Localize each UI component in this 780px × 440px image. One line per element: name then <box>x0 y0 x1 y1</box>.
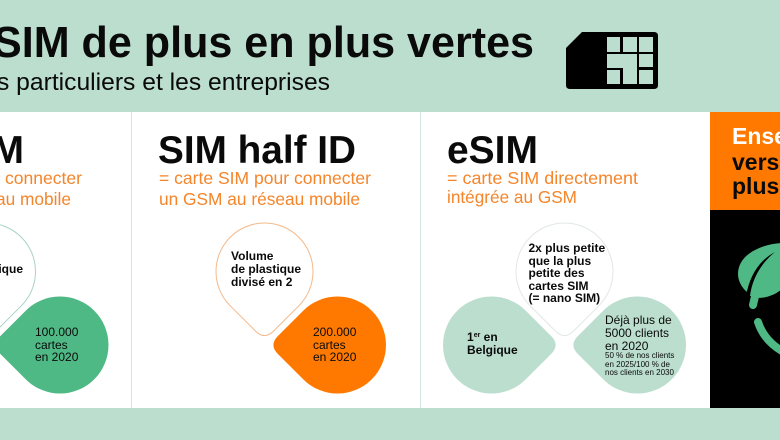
drop: clients <box>573 296 686 394</box>
heading: eSIM: eSIM <box>447 129 538 172</box>
drop: 200.000 cartes: en 2020 <box>313 350 357 364</box>
drop: plastic divided by 2: divisé en 2 <box>231 275 293 289</box>
drop: clients: Déjà plus de <box>605 313 672 327</box>
drop: plastic divided by 2 <box>216 223 313 336</box>
drop: clients: 5000 clients <box>605 326 669 340</box>
drop: plastic divided by 2: de plastique <box>231 262 301 276</box>
white panel <box>0 112 710 408</box>
description: eSIM: = carte SIM directement <box>447 168 638 188</box>
drop: 200.000 cartes: 200.000 <box>313 325 357 339</box>
icon: leaf <box>738 243 780 351</box>
drop: first in Belgium: er <box>474 332 481 339</box>
description: SIM half ID <box>159 168 371 209</box>
drop: 100.000 cartes: 100.000 <box>35 325 79 339</box>
description: eSIM <box>447 168 638 207</box>
drop: first in Belgium: en <box>480 330 498 344</box>
drop: size: (= nano SIM) <box>528 291 600 305</box>
panel: orange header <box>710 112 780 210</box>
drop: clients: en 2020 <box>605 339 649 353</box>
description: SIM half ID: = carte SIM pour connecter <box>159 168 371 188</box>
drop: size <box>516 223 613 336</box>
description: eSIM: intégrée au GSM <box>447 187 577 207</box>
panel: black <box>710 210 780 408</box>
drop: 200.000 cartes: cartes <box>313 338 346 352</box>
drop: size: 2x plus petite <box>528 241 606 255</box>
drop: first in Belgium: Belgique <box>467 343 518 357</box>
drop: size: petite des <box>528 266 585 280</box>
panel: SIM half ID <box>158 129 386 394</box>
drop: clients: nos clients en 2030 <box>605 368 674 377</box>
drop: 200.000 cartes <box>273 296 386 394</box>
panel: eSIM <box>443 129 686 394</box>
drop: 100.000 cartes: cartes <box>35 338 68 352</box>
subtitle: s particuliers et les entreprises <box>0 69 330 96</box>
drop: first in Belgium: 1 <box>467 330 474 344</box>
drop: plastic divided by 2: Volume <box>231 249 274 263</box>
drop: plastic <box>0 223 36 336</box>
description: SIM half ID: un GSM au réseau mobile <box>159 189 360 209</box>
drop: clients: en 2025/100 % de <box>605 360 670 369</box>
heading: SIM half ID: SIM half ID <box>158 129 356 172</box>
drop: size: cartes SIM <box>528 279 589 293</box>
drop: 100.000 cartes: en 2020 <box>35 350 79 364</box>
drop: clients: 50 % de nos clients <box>605 351 674 360</box>
panel: SIM <box>0 129 108 394</box>
drop: first in Belgium <box>443 296 556 394</box>
drop: size: que la plus <box>528 254 592 268</box>
title: SIM de plus en plus vertes <box>0 18 534 67</box>
drop: 100.000 cartes <box>0 296 108 394</box>
description: SIM <box>0 168 82 209</box>
icon: SIM card <box>566 32 658 89</box>
